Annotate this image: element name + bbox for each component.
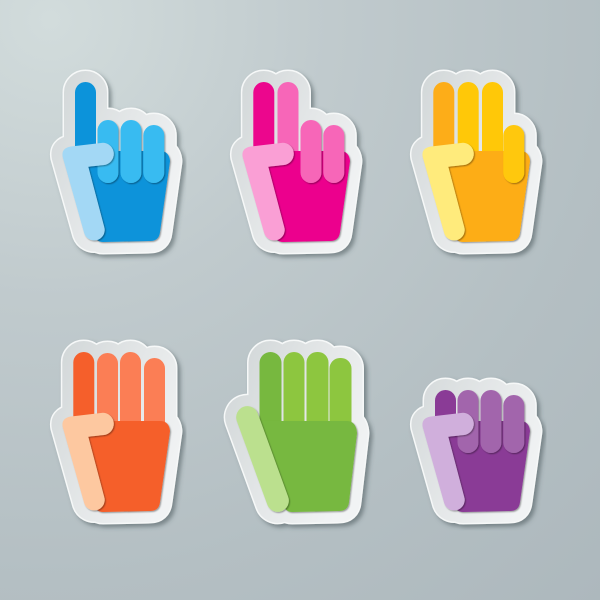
hand sticker: green open hand bbox=[236, 352, 357, 512]
sticker base bbox=[236, 352, 357, 512]
thumb bbox=[242, 143, 294, 240]
sticker base bbox=[422, 82, 530, 242]
thumb bbox=[422, 413, 474, 510]
palm bbox=[440, 421, 530, 512]
palm bbox=[80, 421, 170, 512]
palm bbox=[262, 421, 357, 512]
raised fingers bbox=[433, 82, 503, 162]
raised fingers bbox=[73, 352, 165, 433]
folded fingers bbox=[98, 120, 164, 183]
sticker base bbox=[62, 352, 170, 512]
sticker base bbox=[422, 390, 530, 512]
palm bbox=[80, 151, 170, 242]
hand sticker: orange three fingers bbox=[422, 82, 530, 242]
hand sticker: blue one finger bbox=[62, 82, 170, 242]
thumb bbox=[62, 143, 114, 240]
folded fingers bbox=[458, 390, 524, 453]
thumb bbox=[62, 413, 114, 510]
raised fingers bbox=[260, 352, 352, 432]
thumb bbox=[236, 406, 289, 512]
tucked finger bbox=[435, 390, 456, 440]
palm bbox=[260, 151, 350, 242]
thumb bbox=[422, 143, 474, 240]
raised finger bbox=[75, 82, 96, 162]
raised fingers bbox=[253, 82, 298, 162]
sticker base bbox=[242, 82, 350, 242]
folded finger bbox=[503, 125, 524, 183]
sticker base bbox=[62, 82, 170, 242]
hand sticker: purple fist bbox=[422, 390, 530, 512]
hand sticker: red-orange four fingers bbox=[62, 352, 170, 512]
palm bbox=[440, 151, 530, 242]
hand sticker: pink two fingers bbox=[242, 82, 350, 242]
folded fingers bbox=[300, 120, 344, 183]
